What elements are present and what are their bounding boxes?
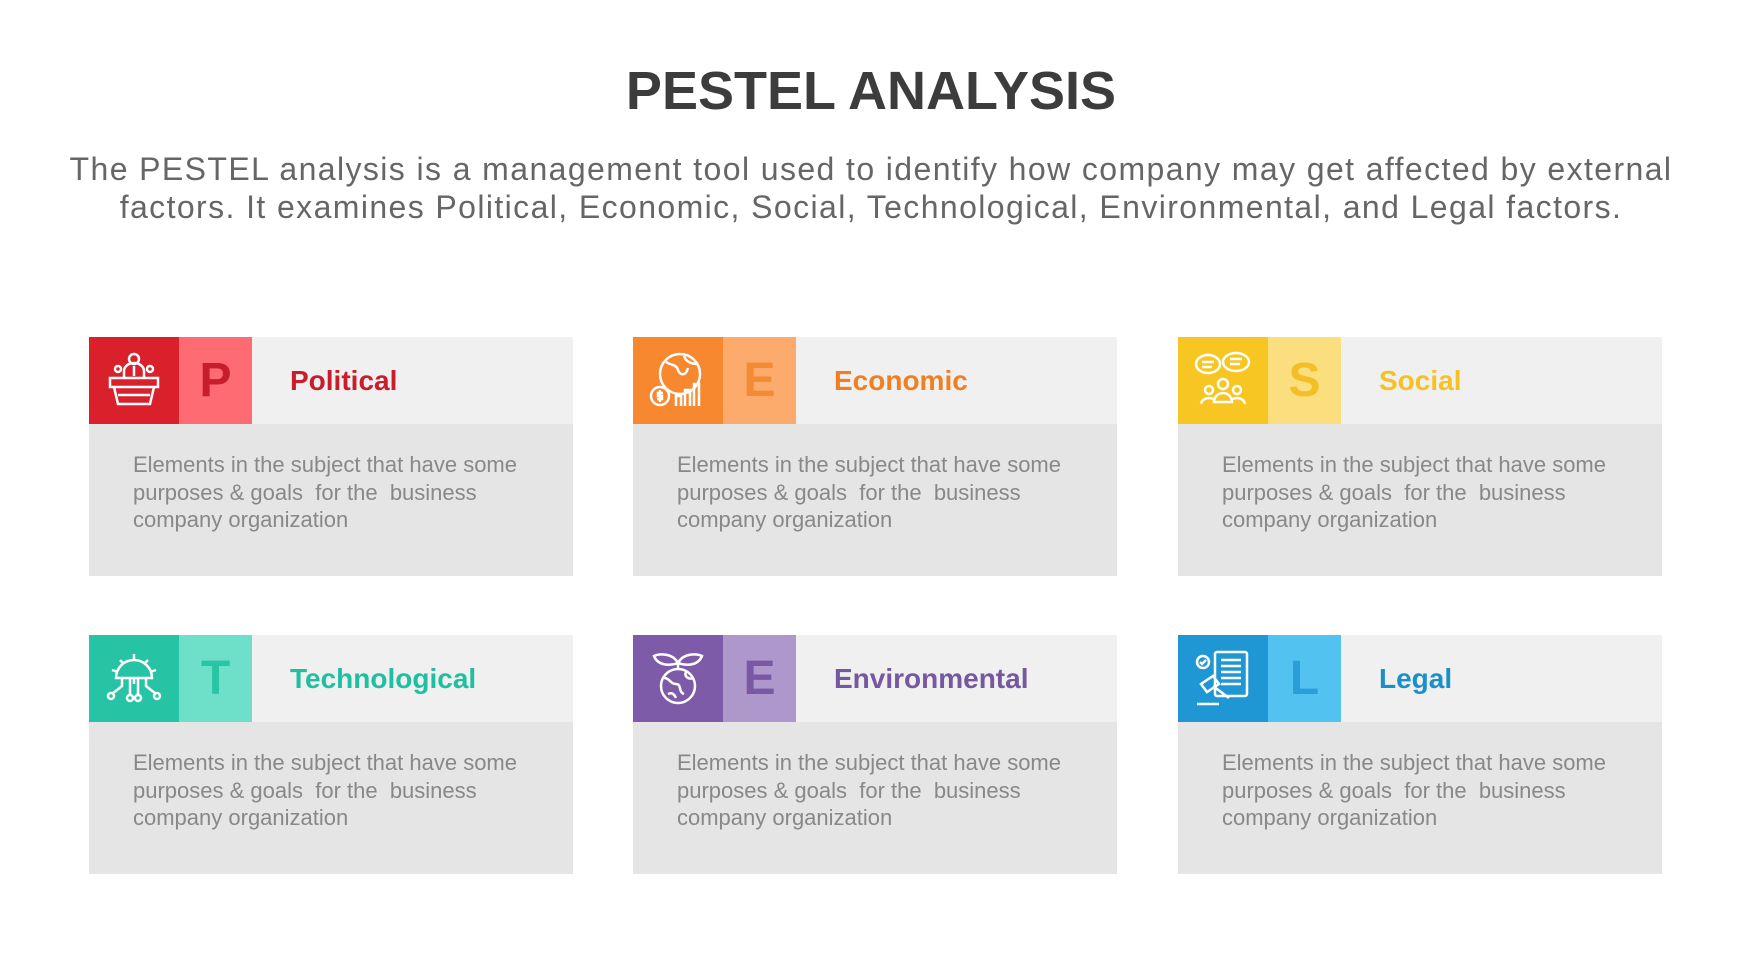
panel: environmental — [633, 635, 1117, 874]
icon: globe chart — [633, 337, 723, 424]
body text: Elements in the subject that have some purposes & goals for the business company organization — [133, 750, 517, 830]
body text: Elements in the subject that have some purposes & goals for the business company organization — [677, 452, 1061, 532]
icon: podium — [89, 337, 179, 424]
panel: social — [1178, 337, 1662, 576]
heading: Environmental — [834, 663, 1028, 694]
subtitle — [70, 151, 1672, 225]
letter L — [1268, 635, 1341, 722]
body text: Elements in the subject that have some purposes & goals for the business company organization — [1222, 452, 1606, 532]
icon: document gavel — [1178, 635, 1268, 722]
icon: gear circuit — [89, 635, 179, 722]
heading: Economic — [834, 365, 968, 396]
icon: plant globe — [633, 635, 723, 722]
letter T — [179, 635, 252, 722]
letter S — [1268, 337, 1341, 424]
panel: political — [89, 337, 573, 576]
letter E: E — [743, 652, 776, 705]
letter P: P — [199, 354, 232, 407]
icon: people chat — [1178, 337, 1268, 424]
heading: Technological — [290, 663, 476, 694]
body text: Elements in the subject that have some purposes & goals for the business company organization — [677, 750, 1061, 830]
body text: Elements in the subject that have some purposes & goals for the business company organization — [133, 452, 517, 532]
letter E: E — [743, 354, 776, 407]
panel: economic — [633, 337, 1117, 576]
subtitle: The PESTEL analysis is a management tool used to identify how company may get affected by external — [70, 151, 1672, 187]
heading: Legal — [1379, 663, 1452, 694]
heading: Political — [290, 365, 397, 396]
letter E — [723, 337, 796, 424]
letter E — [723, 635, 796, 722]
heading: Social — [1379, 365, 1461, 396]
panel: technological — [89, 635, 573, 874]
letter T: T — [201, 652, 230, 705]
panel: legal — [1178, 635, 1662, 874]
letter S: S — [1288, 354, 1320, 407]
letter P — [179, 337, 252, 424]
title: PESTEL ANALYSIS — [626, 61, 1116, 121]
letter L: L — [1290, 652, 1319, 705]
body text: Elements in the subject that have some purposes & goals for the business company organization — [1222, 750, 1606, 830]
subtitle: factors. It examines Political, Economic, Social, Technological, Environmental, and Legal factors. — [120, 189, 1622, 225]
